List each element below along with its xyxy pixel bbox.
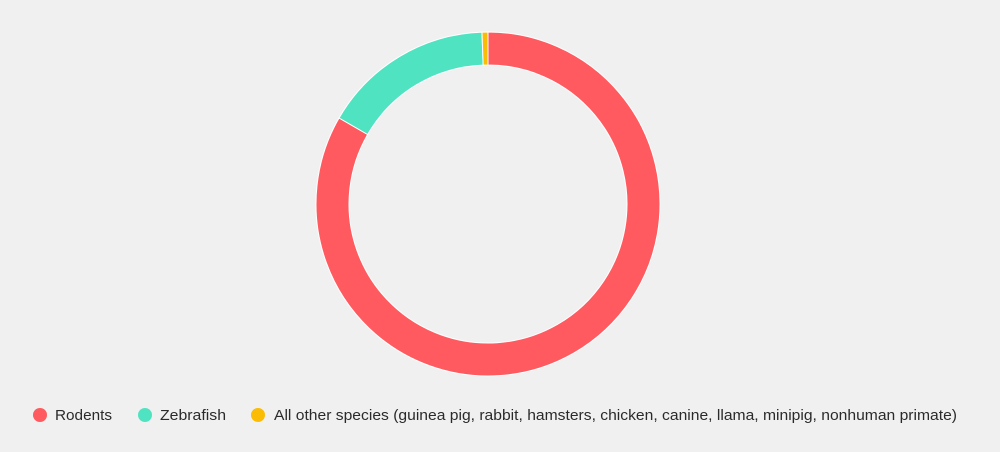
segment: rodents — [316, 32, 660, 376]
donut chart — [316, 32, 660, 376]
legend item: rodents: Rodents — [55, 407, 112, 424]
legend item: zebrafish: Zebrafish — [160, 407, 226, 424]
legend item: all other species: All other species (guinea pig, rabbit, hamsters, chicken, canine, llama, minipig, nonhuman primate) — [274, 407, 957, 424]
segment: all other species — [482, 32, 488, 65]
segment: zebrafish — [339, 32, 483, 134]
legend — [33, 407, 957, 424]
